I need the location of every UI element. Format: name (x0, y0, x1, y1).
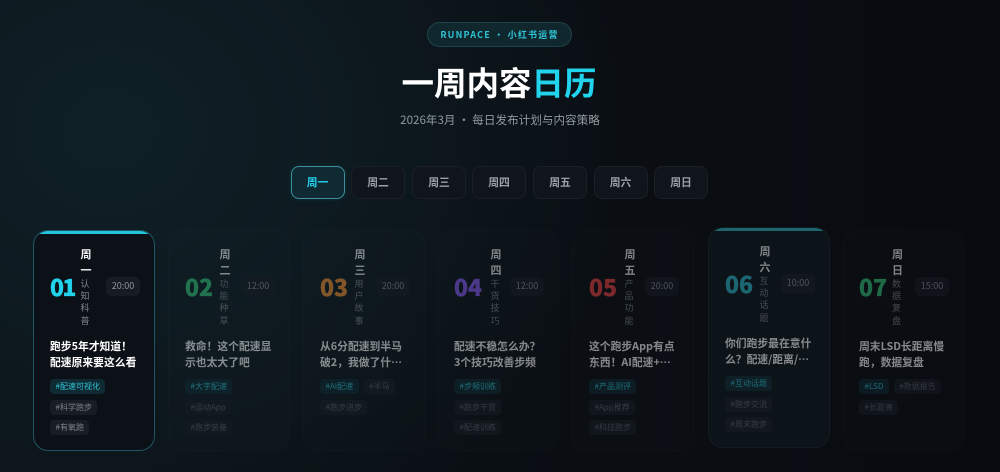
card: Tuesday (168, 230, 290, 451)
tab: Monday active: 周一 (307, 174, 328, 190)
tags (50, 379, 105, 435)
post title: 东西！AI配速+… (589, 354, 671, 370)
post title: 跑步5年才知道！ (50, 338, 132, 354)
tags (454, 379, 501, 433)
time (376, 277, 410, 296)
tags (185, 379, 232, 433)
tab: Thursday (472, 166, 526, 199)
post title (859, 338, 944, 370)
post title: 周末LSD长距离慢 (859, 338, 944, 354)
time (510, 277, 544, 296)
tags: #配速可视化 (56, 381, 100, 392)
time (781, 274, 815, 292)
tags: #周末跑步 (730, 419, 767, 430)
tab: Saturday (594, 166, 648, 199)
number 07: 07 (859, 269, 887, 303)
number 05: 05 (589, 269, 617, 303)
tags (725, 376, 772, 430)
post title: 配速不稳怎么办？ (454, 338, 540, 354)
tab: Thursday: 周四 (488, 174, 510, 190)
post title: 配速原来要这么看 (50, 354, 136, 370)
category: 功能种草 (219, 276, 228, 327)
post title (50, 338, 136, 370)
tags: #科学跑步 (56, 402, 92, 412)
day label: 周六 (760, 243, 770, 275)
time: 20:00 (651, 279, 673, 292)
tags: #跑步装备 (190, 422, 227, 433)
category: 产品功能 (624, 276, 634, 327)
category: 干货技巧 (490, 276, 500, 327)
tab: Sunday (654, 166, 708, 199)
post title (454, 338, 540, 370)
post title: 这个跑步App有点 (589, 338, 675, 354)
tags: #跑步交流 (730, 398, 767, 410)
tags: #互动话题 (730, 378, 767, 389)
post title (320, 338, 402, 370)
day label: 周一 (80, 246, 92, 278)
day label: 周二 (220, 246, 230, 278)
tags: #跑步进步 (326, 402, 362, 412)
number 02: 02 (185, 269, 213, 303)
badge: RUNPACE: RUNPACE ・ 小红书运营 (440, 28, 559, 41)
card: Saturday (708, 227, 830, 448)
tags: #大字配速 (190, 381, 227, 392)
tab: Tuesday: 周二 (367, 174, 389, 190)
tags: #步频训练 (460, 381, 496, 392)
number 03: 03 (320, 269, 348, 303)
tags: #App推荐 (594, 402, 630, 412)
card: Monday (33, 230, 155, 451)
time: 20:00 (382, 279, 404, 292)
day label: 周三 (354, 246, 366, 278)
tab: Wednesday (412, 166, 466, 199)
card: Wednesday (303, 230, 425, 451)
tags: #半马 (369, 381, 390, 392)
time: 10:00 (787, 276, 809, 289)
tags: #产品测评 (594, 381, 631, 392)
tags: #运动App (190, 402, 226, 412)
tags: #科技跑步 (594, 422, 631, 433)
card: Thursday (437, 230, 559, 451)
category: 用户故事 (354, 276, 364, 327)
card: Friday (572, 230, 694, 451)
tags (589, 379, 636, 433)
post title: 从6分配速到半马 (320, 338, 402, 354)
card: Sunday (842, 230, 964, 451)
tab: Monday active (290, 166, 344, 199)
tags: #LSD (864, 381, 883, 392)
number 06: 06 (725, 266, 753, 300)
tags: #跑步干货 (460, 402, 496, 412)
tags: #AI配速 (326, 381, 353, 392)
tab: Saturday: 周六 (610, 174, 631, 190)
time: 12:00 (516, 279, 538, 292)
tags: #有氧跑 (56, 422, 84, 433)
category: 互动话题 (759, 274, 768, 324)
day label: 周日 (892, 246, 903, 278)
time: 20:00 (112, 279, 134, 292)
tab: Tuesday (351, 166, 405, 199)
title: 一周内容日历 (401, 58, 597, 105)
subtitle: 2026年3月 ・ 每日发布计划与内容策略 (400, 112, 600, 128)
tab: Sunday: 周日 (670, 174, 692, 190)
post title: 你们跑步最在意什 (725, 335, 811, 351)
post title: 救命！这个配速显 (185, 338, 271, 354)
tab: Wednesday: 周三 (428, 174, 450, 190)
time: 12:00 (247, 279, 269, 292)
time: 15:00 (921, 279, 943, 292)
day label: 周五 (624, 246, 636, 278)
time (645, 277, 679, 296)
post title (725, 335, 811, 367)
post title (185, 338, 272, 370)
time (241, 277, 275, 296)
tags (320, 379, 390, 412)
time (915, 277, 949, 296)
tags: #数据报告 (899, 381, 936, 392)
day label: 周四 (490, 246, 502, 278)
time (106, 277, 140, 296)
tags (859, 379, 941, 415)
post title: 3个技巧改善步频 (454, 354, 536, 370)
post title: 跑，数据复盘 (859, 354, 924, 370)
tags: #长距离 (864, 402, 893, 412)
category: 数据复盘 (892, 276, 901, 327)
post title: 么？配速/距离/… (725, 351, 809, 367)
number 01: 01 (50, 269, 75, 303)
number 04: 04 (454, 269, 482, 303)
post title: 示也太大了吧 (185, 354, 250, 370)
category: 认知科普 (80, 276, 90, 327)
tab: Friday: 周五 (549, 174, 571, 190)
badge: RUNPACE (427, 22, 572, 47)
post title: 破2，我做了什… (320, 354, 402, 370)
tab: Friday (533, 166, 587, 199)
tags: #配速训练 (460, 422, 496, 433)
post title (589, 338, 675, 370)
